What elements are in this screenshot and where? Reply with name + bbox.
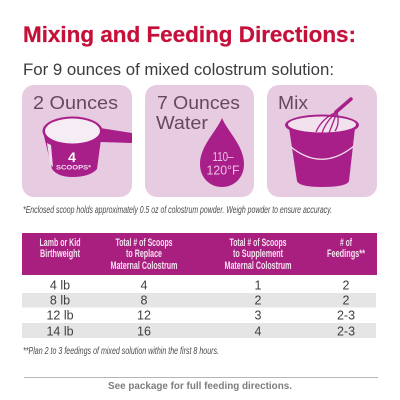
feeding table	[22, 233, 377, 338]
table rows: 2-3	[337, 308, 355, 322]
table header: # of	[340, 237, 352, 249]
table rows: 8 lb	[50, 294, 70, 308]
icon: measuring scoop	[42, 116, 132, 177]
panel heading: Mix: Mix	[278, 93, 308, 113]
table rows: 16	[137, 324, 151, 338]
panel: mix	[267, 85, 377, 197]
table header: Maternal Colostrum	[224, 260, 292, 272]
title: Mixing and Feeding Directions:	[23, 22, 356, 47]
panel heading: 7 Ounces Water: 7 Ounces	[157, 93, 240, 113]
table rows: 1	[255, 278, 262, 292]
table header: to Supplement	[233, 248, 283, 260]
table header: Total # of Scoops	[116, 237, 172, 249]
table rows: 4	[255, 324, 262, 338]
panel heading: 2 Ounces: 2 Ounces	[33, 93, 118, 113]
table header: Feedings**	[327, 248, 365, 260]
table header: Birthweight	[40, 248, 80, 260]
icon: bucket and whisk	[285, 99, 359, 187]
table header: Total # of Scoops	[230, 237, 286, 249]
table rows: 2	[343, 278, 350, 292]
table rows: 14 lb	[46, 324, 74, 338]
table rows: 12	[137, 308, 151, 322]
table header: Lamb or Kid	[40, 237, 80, 249]
temperature label: 110–	[212, 150, 234, 164]
table rows: 8	[141, 294, 148, 308]
table rows: 2-3	[337, 324, 355, 338]
table rows: 4	[141, 278, 148, 292]
table rows	[46, 278, 355, 338]
table rows: 2	[255, 294, 262, 308]
footnote: feedings plan: **Plan 2 to 3 feedings of mixed solution within the first 8 hours.	[23, 346, 219, 357]
icon: water drop	[200, 118, 244, 187]
icon: measuring scoop: SCOOPS*	[56, 166, 92, 172]
whisk	[316, 99, 351, 133]
table row stripes	[22, 293, 376, 338]
table rows: 12 lb	[46, 308, 74, 322]
panel: 2 ounces scoop	[22, 85, 132, 197]
subtitle: For 9 ounces of mixed colostrum solution:	[23, 61, 334, 79]
footer note: See package for full feeding directions.	[108, 381, 292, 392]
table header	[22, 233, 377, 275]
table header: Maternal Colostrum	[110, 260, 178, 272]
panel: 7 ounces water: Water	[156, 113, 208, 133]
table rows: 4 lb	[50, 278, 70, 292]
table header: to Replace	[126, 248, 162, 260]
icon: water drop: 120°F	[206, 164, 240, 178]
table rows: 3	[255, 308, 262, 322]
table rows: 2	[343, 294, 350, 308]
scoop label: 4	[68, 149, 76, 165]
panel: 7 ounces water	[145, 85, 254, 197]
